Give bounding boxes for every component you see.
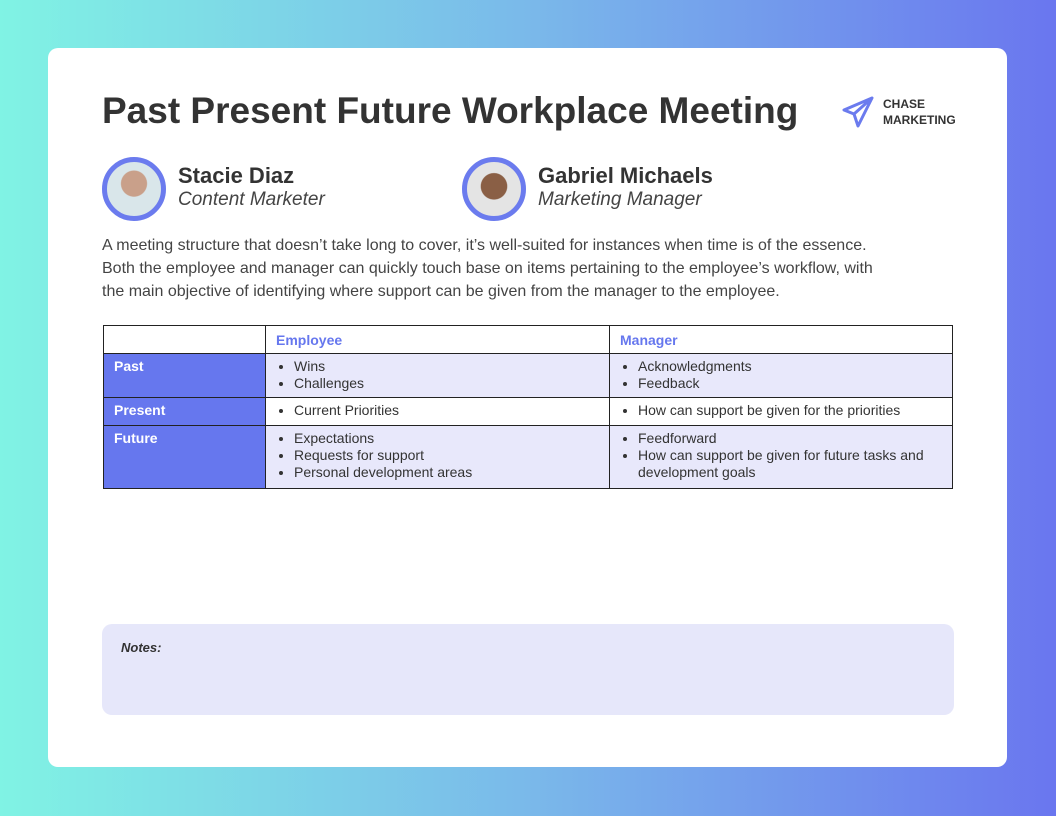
- notes box: [102, 624, 954, 715]
- table: Employee: [276, 332, 342, 348]
- description: [102, 237, 873, 300]
- person: Gabriel Michaels: [462, 157, 713, 221]
- person: Stacie Diaz: Content Marketer: [178, 189, 325, 210]
- description: the main objective of identifying where support can be given from the manager to the employee.: [102, 283, 780, 300]
- table: Feedback: [638, 375, 699, 391]
- icon: paper plane: [842, 96, 874, 128]
- table: Past: [114, 358, 144, 374]
- table: Manager: [620, 332, 678, 348]
- table: How can support be given for future tasks and development goals: [638, 447, 924, 480]
- logo text: [883, 97, 956, 127]
- notes box: Notes:: [121, 640, 161, 655]
- person: Stacie Diaz: [102, 157, 326, 221]
- table: Current Priorities: [294, 402, 399, 418]
- person: Gabriel Michaels: Gabriel Michaels: [538, 163, 713, 188]
- table: Personal development areas: [294, 464, 472, 480]
- table: How can support be given for the priorities: [638, 402, 900, 418]
- table: Acknowledgments: [638, 358, 752, 374]
- logo text: MARKETING: [883, 113, 956, 127]
- person: Stacie Diaz: Stacie Diaz: [178, 163, 294, 188]
- table: Challenges: [294, 375, 364, 391]
- table: Requests for support: [294, 447, 424, 463]
- title: Past Present Future Workplace Meeting: [102, 90, 798, 131]
- table: Expectations: [294, 430, 374, 446]
- logo: [842, 96, 956, 128]
- table: Future: [114, 430, 158, 446]
- description: Both the employee and manager can quickly touch base on items pertaining to the employee’s workflow, with: [102, 260, 873, 277]
- description: A meeting structure that doesn’t take long to cover, it’s well-suited for instances when time is of the essence.: [102, 237, 867, 254]
- person: Gabriel Michaels: Marketing Manager: [538, 189, 702, 210]
- logo text: CHASE: [883, 97, 925, 111]
- table: [103, 325, 953, 489]
- table: Wins: [294, 358, 325, 374]
- table: Present: [114, 402, 165, 418]
- table: Feedforward: [638, 430, 717, 446]
